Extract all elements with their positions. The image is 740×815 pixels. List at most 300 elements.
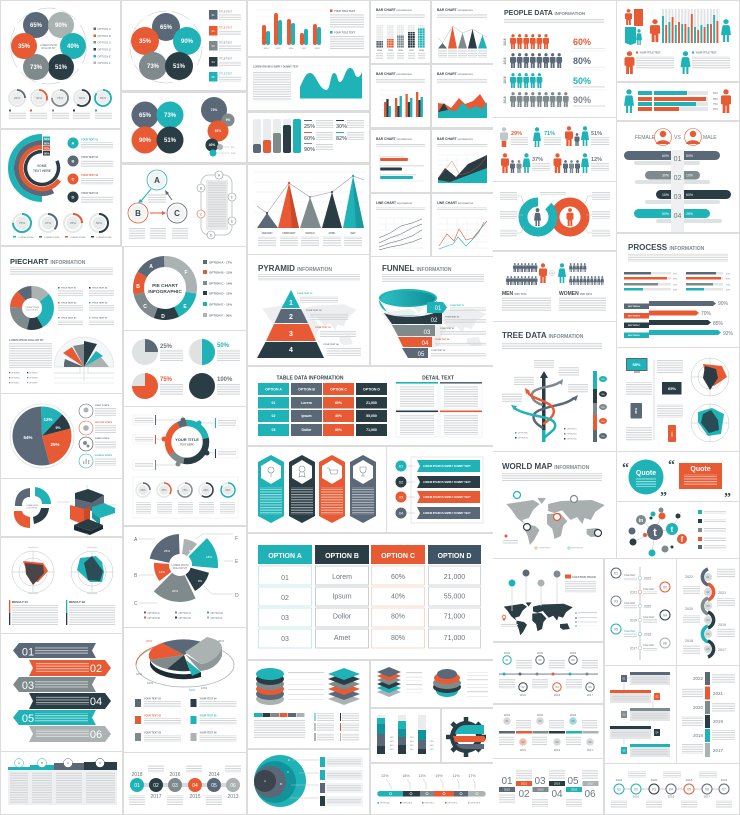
teal line <box>439 222 484 249</box>
circle numbers <box>706 575 710 651</box>
paragraph <box>9 343 52 368</box>
legend: OPTION F <box>210 616 223 620</box>
slice values: 25% <box>164 549 170 553</box>
circle 51% <box>165 52 193 80</box>
donut values: 37% <box>45 221 51 225</box>
panel: vertical timeline <box>605 559 676 665</box>
split donut <box>14 487 51 528</box>
panel: 3d pie with orbit <box>124 628 246 752</box>
year labels: 2018 <box>315 48 320 50</box>
legend: OPTION B <box>402 802 413 804</box>
teal area <box>438 168 487 183</box>
donut labels: 25% <box>14 96 20 100</box>
column <box>705 672 710 757</box>
values: 60% <box>713 92 719 95</box>
column text <box>10 772 115 803</box>
legend: OPTION D <box>448 802 458 804</box>
year text: 2018 <box>571 788 578 792</box>
circle 35% <box>11 33 37 59</box>
percentages <box>139 25 194 70</box>
panel: tubes <box>371 709 440 762</box>
panel: numbered bars <box>387 447 493 532</box>
legend: OPTION E <box>210 611 223 615</box>
bar labels: LOREM IPSUM IS SIMPLY DUMMY TEXT <box>423 496 471 499</box>
percent labels: 11% <box>453 774 460 778</box>
bubble labels: 73% <box>211 108 217 112</box>
years: 2021 <box>633 794 640 798</box>
circle 40% <box>60 33 86 59</box>
small bubble labels: 17% <box>231 153 235 155</box>
arrow 05: 05 <box>22 713 34 725</box>
titles <box>58 286 114 326</box>
percent one: 25% <box>304 124 315 130</box>
pie 25 <box>132 339 158 365</box>
tier numbers <box>289 300 293 354</box>
pie 50 <box>189 339 215 365</box>
percentages <box>18 23 80 71</box>
heading: BAR CHART INFORMATION <box>376 72 412 76</box>
years: 2020 <box>537 651 544 655</box>
intro <box>502 342 602 350</box>
values: 95% <box>713 98 719 101</box>
letters <box>134 536 239 607</box>
circle numbers: 01 <box>706 575 710 579</box>
bubbles <box>628 508 687 556</box>
axis <box>380 154 424 181</box>
title list: 05 <box>212 75 215 79</box>
legend <box>94 27 111 65</box>
notes <box>502 297 606 311</box>
top circles <box>503 656 594 691</box>
orbit <box>136 643 234 687</box>
arc labels: 50% <box>44 137 50 141</box>
badge numbers: 04 <box>663 614 667 618</box>
numbers <box>134 783 236 789</box>
numbers: 01 <box>617 787 621 791</box>
years: 2016 <box>398 50 404 52</box>
donut title: TEXT HERE <box>180 444 194 446</box>
heading: FEMALE <box>635 135 656 141</box>
intro <box>376 78 425 83</box>
heading: LOREM IPSUM IS SIMPLY DUMMY TEXT <box>253 66 299 68</box>
percentages: 35% <box>18 44 31 50</box>
panel: four column table <box>1 752 122 814</box>
section values <box>701 301 734 337</box>
grid <box>300 66 362 99</box>
donut values: 60% <box>203 489 209 492</box>
sub heading: LOREM IPSUM DOLLOR SIT <box>9 338 44 342</box>
section arrows <box>649 301 721 335</box>
nodes <box>502 672 588 676</box>
node letters <box>200 173 234 237</box>
box 5: 05 <box>623 750 626 752</box>
slice C <box>154 573 196 602</box>
table text: 60% <box>335 401 343 405</box>
circles <box>614 784 729 794</box>
panel: pyramid <box>248 255 369 365</box>
slate band <box>456 744 484 749</box>
circle 65% <box>23 12 49 38</box>
tube legend: 20% <box>390 749 394 751</box>
title texts: TITLE TEXT <box>643 589 655 591</box>
step text: FOURTH STEPS <box>95 455 112 457</box>
tube legend <box>390 737 434 751</box>
heading: BAR CHART INFORMATION <box>437 72 473 76</box>
node letters: D <box>210 233 213 237</box>
top numbers: 01 <box>501 776 513 787</box>
circle B: B <box>135 209 141 218</box>
legend: OPTION F <box>98 61 111 65</box>
column C <box>323 383 354 436</box>
years: 2021 <box>713 691 724 696</box>
circle 73% <box>23 54 49 80</box>
figure 29% <box>500 127 508 147</box>
tag labels: YOUR TEXT 01 <box>450 305 465 307</box>
body <box>8 770 117 805</box>
cylinder tracks <box>253 119 301 153</box>
panel: layered diamonds and sphere <box>371 661 493 707</box>
rose legend <box>9 372 38 384</box>
tier 3 <box>266 324 316 341</box>
panel: piechart information <box>1 247 122 393</box>
donut values: 25% <box>70 221 76 225</box>
numbers: 04 <box>192 783 198 789</box>
monitor: 55% <box>632 362 641 367</box>
donut legend: LOREM IPSUM <box>70 237 85 239</box>
years: 2017 <box>587 693 594 697</box>
heading: LOCATION TRACK <box>572 575 596 579</box>
bar labels: LOREM IPSUM IS SIMPLY DUMMY TEXT <box>423 481 471 484</box>
panel: cylinders <box>248 113 369 162</box>
percentages: 65% <box>30 23 43 29</box>
tier 2 <box>274 309 308 323</box>
header circles <box>14 758 104 768</box>
titles: TITLE TEXT 06 <box>92 318 108 320</box>
values: 30% <box>218 639 224 643</box>
panel: numbered steps <box>493 759 603 814</box>
years: 2017 <box>150 794 162 800</box>
box 1: 01 <box>623 678 626 680</box>
values <box>713 92 719 111</box>
legend: OPTION C <box>424 802 435 804</box>
badges: B <box>72 158 75 164</box>
node letters: F <box>231 195 233 199</box>
center title: PIE CHART <box>152 283 178 289</box>
items right: YOUR TEXT 04 <box>200 698 217 700</box>
quote marks: ” <box>660 490 667 505</box>
panel: table data <box>248 367 493 445</box>
panel: six percentage circles <box>1 1 120 128</box>
legend: OPTION E <box>470 802 481 804</box>
header text <box>268 553 471 560</box>
left callouts <box>133 415 156 470</box>
table values: Amet <box>334 635 350 642</box>
items right <box>190 698 236 742</box>
percentages: 40% <box>67 44 80 50</box>
dark map <box>504 602 573 635</box>
numbers: 06 <box>588 685 592 689</box>
woman figure <box>558 263 566 283</box>
step text: FIRST STEPS <box>95 405 110 407</box>
slice dark <box>167 655 190 671</box>
tube one <box>377 715 385 754</box>
years: 2022 <box>616 778 623 782</box>
bottom table <box>133 477 238 518</box>
panel: numbered arrows <box>1 634 122 751</box>
panel: cone bar chart <box>432 1 493 63</box>
table values: 01 <box>281 575 289 582</box>
tube legend: 40% <box>390 745 394 747</box>
arrow 03: 03 <box>22 680 34 692</box>
percentages: 90% <box>55 23 68 29</box>
values: 10% <box>189 688 195 692</box>
markers <box>162 418 210 466</box>
rose rows <box>54 373 114 383</box>
panel: timeline dots <box>493 643 603 703</box>
bubble letters: f <box>681 535 684 544</box>
heading: BAR CHART INFORMATION <box>437 137 473 141</box>
options: OPTION C - 16% <box>209 282 233 286</box>
circle numbers: 06 <box>706 647 710 651</box>
year text: 2019 <box>554 782 561 786</box>
text <box>438 50 487 58</box>
step icons <box>79 404 93 468</box>
legend: OPTION C <box>98 40 111 44</box>
woman <box>624 89 634 113</box>
right callouts <box>215 418 238 458</box>
tablet: 45% <box>634 408 638 414</box>
legend one: YOUR TITLE TEXT <box>334 10 356 13</box>
tags <box>417 302 447 358</box>
map legend <box>503 534 583 549</box>
center note <box>148 194 166 203</box>
women heading: WOMEN IND 82% <box>559 291 592 297</box>
circle numbers: 04 <box>706 618 710 622</box>
numbers: 04 <box>669 787 673 791</box>
tube legend: 20% <box>410 737 414 739</box>
values: 25% <box>160 344 173 350</box>
donut legend: LOREM IPSUM <box>18 237 33 239</box>
legend: OPTION D <box>567 434 577 436</box>
layer 2 <box>384 313 442 324</box>
values: 50% <box>217 343 230 349</box>
numbers: 04 <box>674 213 681 220</box>
month labels: JANUARY <box>261 232 273 235</box>
donut text <box>136 502 235 514</box>
circle 65% <box>152 13 180 41</box>
table values: Dollor <box>333 614 352 620</box>
orange bars <box>666 14 717 43</box>
percent two: 60% <box>304 136 315 142</box>
tag labels <box>431 305 486 357</box>
years: 2019 <box>713 719 724 724</box>
titles: TITLE TEXT 03 <box>61 318 77 320</box>
panel: quotes <box>617 452 739 506</box>
heading: BAR CHART INFORMATION <box>376 137 412 141</box>
years: 2022 <box>644 576 651 580</box>
years: 2018 <box>644 632 651 636</box>
percent labels <box>381 774 476 778</box>
links <box>633 511 682 553</box>
percentages: 90% <box>573 95 591 105</box>
table text: Lorem <box>301 401 312 405</box>
percentages: 29% <box>511 131 522 137</box>
table values: 55,000 <box>444 594 465 600</box>
bar labels: LOREM IPSUM IS SIMPLY DUMMY TEXT <box>423 512 471 515</box>
man <box>721 89 731 113</box>
laptop: 65% <box>668 386 676 391</box>
percentages: 73% <box>30 65 43 71</box>
grid <box>256 10 322 45</box>
banner icons <box>268 466 366 477</box>
donut labels: 30% <box>36 96 42 100</box>
numbers: 04 <box>555 685 559 689</box>
legend: OPTION A <box>98 27 111 31</box>
3d labels <box>57 485 116 537</box>
numbers: 03 <box>652 787 656 791</box>
circle letters: D <box>288 758 290 762</box>
intro <box>504 18 604 24</box>
top numbers: 03 <box>534 776 546 787</box>
title texts: TITLE TEXT <box>643 645 655 647</box>
node letters: C <box>200 212 203 216</box>
numbers: 06 <box>230 783 236 789</box>
percentages: 51% <box>173 64 186 70</box>
cones <box>438 26 487 48</box>
heading: PIECHART INFORMATION <box>10 257 86 266</box>
items left: YOUR TEXT 02 <box>144 714 162 718</box>
year labels: 2014 <box>264 48 269 50</box>
heading: LINE CHART INFORMATION <box>376 201 413 205</box>
panel: area chart <box>248 58 369 110</box>
letters: E <box>235 559 239 565</box>
years <box>630 576 651 650</box>
percents: 30% <box>662 174 669 178</box>
four circles <box>132 102 184 154</box>
tube tag text: 18% <box>601 379 605 381</box>
percent labels: 22% <box>381 774 389 778</box>
orbit orange arc <box>136 644 170 665</box>
title list: 03 <box>212 44 215 48</box>
step text: SECOND STEPS <box>95 422 113 424</box>
list text <box>219 10 241 82</box>
option C cells <box>372 566 424 648</box>
small donuts <box>9 90 111 106</box>
paragraph <box>254 719 305 739</box>
percents: 50% <box>686 154 693 158</box>
years: 2021 <box>520 693 527 697</box>
center text lines <box>208 182 226 228</box>
notes <box>499 659 598 689</box>
segments <box>377 791 486 796</box>
dividers <box>504 51 606 90</box>
header cells <box>258 545 481 564</box>
percentages: 60% <box>573 37 591 47</box>
numbers <box>617 787 726 791</box>
slice values: 9% <box>198 579 202 583</box>
rose legend: OPTION A <box>11 372 20 374</box>
segment letters: D <box>161 314 165 320</box>
list text: TITLE TEXT <box>219 42 233 44</box>
tracks <box>380 156 424 176</box>
panel: main pie with steps <box>1 394 122 478</box>
percent four: 30% <box>336 124 347 130</box>
donut labels: 75% <box>57 96 63 100</box>
year text: 2022 <box>504 788 511 792</box>
panel: layered area chart <box>432 65 493 127</box>
panel: exploded pie <box>124 527 246 627</box>
connector <box>624 678 653 744</box>
line <box>499 674 598 675</box>
tag labels: YOUR TEXT 04 <box>435 338 450 341</box>
tier labels: YOUR TEXT 04 <box>323 343 339 346</box>
legend <box>378 802 481 804</box>
table text: 71,000 <box>366 428 377 432</box>
step text: THIRD STEPS <box>95 438 110 440</box>
years: 2019 <box>554 748 561 752</box>
heading: BAR CHART INFORMATION <box>437 8 473 12</box>
center text box <box>206 180 228 230</box>
values: 10% <box>201 686 207 690</box>
dark bars <box>386 99 421 117</box>
donut labels: 85% <box>100 96 106 100</box>
row 80% <box>510 53 562 68</box>
heading: VS <box>674 135 681 141</box>
header letters <box>18 761 102 765</box>
donut center: DOLLOR SIT <box>26 310 39 312</box>
percentages: 71% <box>544 131 555 137</box>
years: 2017 <box>718 648 726 652</box>
sphere labels <box>467 671 488 696</box>
options: OPTION A - 17% <box>209 260 232 264</box>
tube legend: 60% <box>410 741 414 743</box>
percent three: 90% <box>304 147 315 153</box>
option B cells <box>316 566 368 648</box>
table title: TABLE DATA INFORMATION <box>277 376 344 382</box>
intro <box>437 14 487 19</box>
line <box>619 788 724 790</box>
badges <box>68 138 78 202</box>
center title: INFOGRAPHIC <box>148 289 182 295</box>
circle 35% <box>131 27 159 55</box>
right values: 40% <box>726 290 730 292</box>
year bars <box>499 781 598 792</box>
circle 51% <box>48 54 74 80</box>
lines <box>379 219 422 250</box>
title texts <box>624 575 657 651</box>
items right: YOUR TEXT 06 <box>200 732 217 734</box>
table values: 02 <box>281 595 289 602</box>
panel: radial arcs <box>1 130 120 245</box>
leaders <box>139 534 233 603</box>
donut title: YOUR TITLE <box>175 437 199 442</box>
years: 2022 <box>685 575 693 579</box>
years: 2018 <box>570 713 577 717</box>
table text: 02 <box>272 414 275 418</box>
tag numbers: 04 <box>422 341 429 347</box>
radar one <box>691 358 729 396</box>
legend: OPTION B <box>148 616 160 620</box>
tag labels: YOUR TEXT 05 <box>431 350 446 352</box>
left callouts <box>500 192 517 237</box>
panel: pie chart infographic <box>124 247 246 330</box>
title texts: TITLE TEXT <box>624 575 636 577</box>
donut center: LOREM IPSUM <box>25 307 39 309</box>
dark area <box>438 155 487 183</box>
years: 2022 <box>504 713 511 717</box>
bars <box>417 460 480 519</box>
badges: D <box>72 194 75 200</box>
